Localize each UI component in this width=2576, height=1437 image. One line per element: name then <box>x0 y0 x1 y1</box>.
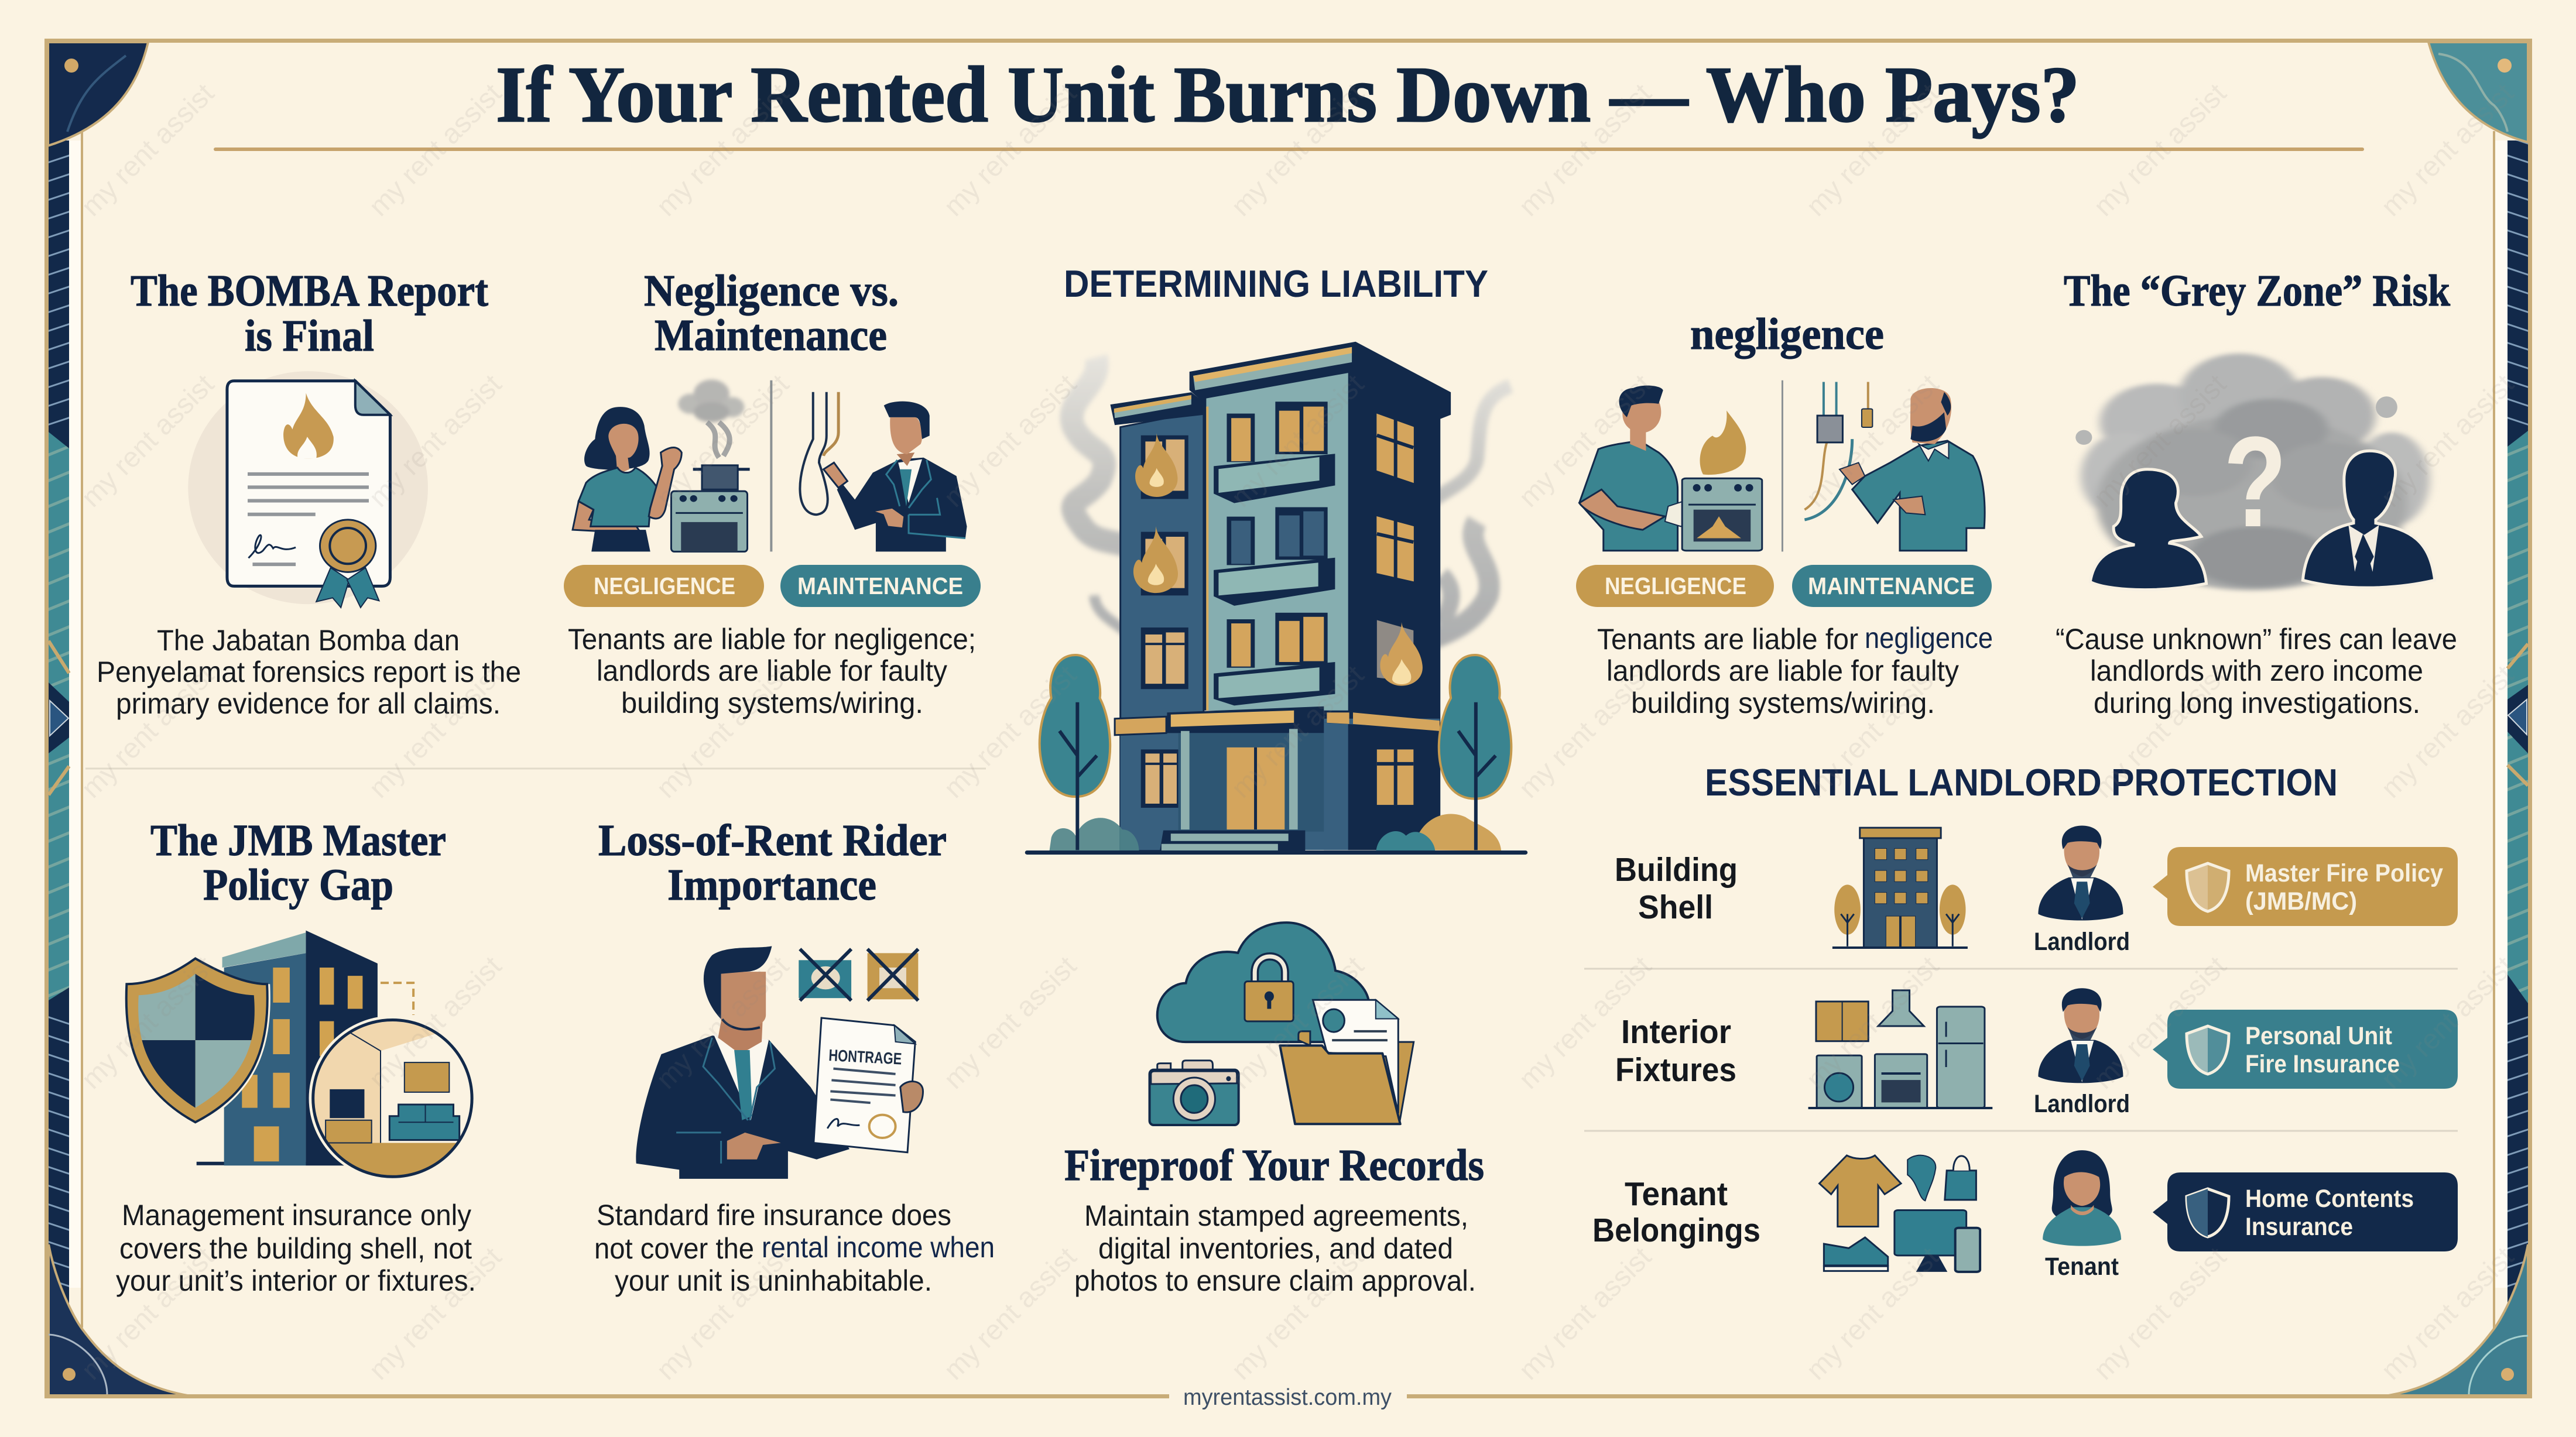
row label: Tenant <box>1625 1175 1728 1213</box>
body text: Management insurance only <box>122 1199 471 1232</box>
heading: Loss-of-Rent Rider <box>598 816 947 865</box>
heading: negligence <box>1690 310 1884 359</box>
panel: JMB master policy gap <box>116 816 482 1297</box>
body text: your unit’s interior or fixtures. <box>116 1264 476 1297</box>
policy callout <box>2153 847 2458 926</box>
body text: Standard fire insurance does <box>597 1199 951 1232</box>
icon: tenant belongings <box>1820 1155 1980 1272</box>
footer website: myrentassist.com.my <box>1183 1385 1392 1410</box>
body text: digital inventories, and dated <box>1098 1232 1453 1265</box>
body text <box>1597 622 1993 719</box>
icon: tenant <box>2043 1150 2121 1246</box>
row: tenant belongings <box>1592 1150 2458 1281</box>
policy callout: Fire Insurance <box>2245 1050 2400 1078</box>
body text: landlords with zero income <box>2090 654 2423 687</box>
label pills <box>1576 565 1992 607</box>
body text <box>116 1199 476 1297</box>
heading: ESSENTIAL LANDLORD PROTECTION <box>1705 761 2338 804</box>
heading: Maintenance <box>655 311 887 360</box>
panel: determining liability <box>1027 262 1526 852</box>
heading: Importance <box>667 860 876 910</box>
body text: rental income when <box>762 1231 995 1264</box>
icon: kitchen fixtures <box>1808 990 1992 1108</box>
body text: primary evidence for all claims. <box>116 687 501 720</box>
illustration: burning apartment building <box>1027 342 1526 852</box>
body text: your unit is uninhabitable. <box>615 1264 932 1297</box>
body text: The Jabatan Bomba dan <box>157 624 460 657</box>
row label: Shell <box>1638 889 1713 926</box>
heading <box>131 266 488 361</box>
body text: landlords are liable for faulty <box>1606 654 1959 687</box>
row: interior fixtures <box>1615 988 2458 1118</box>
panel: loss-of-rent rider <box>594 816 995 1297</box>
title: If Your Rented Unit Burns Down — Who Pays? <box>496 51 2080 139</box>
label pills: NEGLIGENCE <box>594 572 735 599</box>
document heading text: HONTRAGE <box>828 1046 902 1068</box>
body text <box>594 1199 995 1297</box>
row label <box>1615 1013 1736 1089</box>
icon: shield, building and unit interior <box>124 931 482 1182</box>
heading: The JMB Master <box>150 816 446 865</box>
heading: Policy Gap <box>203 860 393 910</box>
policy callout: (JMB/MC) <box>2245 887 2357 915</box>
body text: Tenants are liable for negligence; <box>568 623 976 656</box>
icon: cloud lock, camera and folder <box>1150 922 1414 1125</box>
role label: Landlord <box>2034 928 2130 956</box>
heading <box>644 266 899 360</box>
heading: The BOMBA Report <box>131 266 488 315</box>
panel: essential landlord protection <box>1584 761 2458 1281</box>
icon: fire report document with seal <box>188 371 428 608</box>
heading: DETERMINING LIABILITY <box>1064 262 1488 305</box>
body text: building systems/wiring. <box>1631 687 1935 719</box>
question mark: ? <box>2224 410 2287 554</box>
body text <box>97 624 521 720</box>
heading: Fireproof Your Records <box>1064 1141 1484 1190</box>
body text: negligence <box>1865 622 1993 654</box>
icon: landlord <box>2038 988 2123 1083</box>
policy callout: Master Fire Policy <box>2245 859 2443 887</box>
role label: Landlord <box>2034 1090 2130 1118</box>
icon: building <box>1832 828 1968 948</box>
icon: man in suit holding contract <box>636 946 923 1179</box>
role label: Tenant <box>2045 1253 2119 1281</box>
panel: negligence vs maintenance <box>564 266 981 719</box>
icon: man at oven and electrician <box>1580 380 1985 551</box>
body text <box>1074 1199 1476 1297</box>
row label: Building <box>1615 851 1738 889</box>
body text: building systems/wiring. <box>621 687 923 719</box>
row label <box>1592 1175 1760 1249</box>
heading: is Final <box>245 311 374 361</box>
body text: “Cause unknown” fires can leave <box>2056 623 2457 656</box>
icon: landlord <box>2038 825 2123 921</box>
body text: photos to ensure claim approval. <box>1074 1264 1476 1297</box>
panel: BOMBA report <box>97 266 521 720</box>
policy callout: Insurance <box>2245 1213 2353 1241</box>
panel: negligence (right duplicate) <box>1576 310 1993 719</box>
heading: The “Grey Zone” Risk <box>2064 266 2451 315</box>
label pills <box>564 565 981 607</box>
label pills: MAINTENANCE <box>1808 572 1975 599</box>
body text: covers the building shell, not <box>119 1232 472 1265</box>
row: building shell <box>1615 825 2458 956</box>
heading <box>598 816 947 910</box>
row label: Interior <box>1621 1013 1731 1051</box>
icon: smoke cloud with two silhouettes <box>2075 354 2435 590</box>
label pills: MAINTENANCE <box>797 572 963 599</box>
panel: grey zone risk <box>2056 266 2457 719</box>
body text: Penyelamat forensics report is the <box>97 656 521 688</box>
icon: woman at stove and man with wiring <box>573 380 967 551</box>
panel: fireproof your records <box>1064 922 1484 1297</box>
body text: Maintain stamped agreements, <box>1084 1199 1468 1232</box>
row label: Belongings <box>1592 1212 1760 1249</box>
body text: Tenants are liable for <box>1597 623 1858 656</box>
body text: landlords are liable for faulty <box>597 654 947 687</box>
policy callout <box>2153 1010 2458 1089</box>
label pills: NEGLIGENCE <box>1605 572 1746 599</box>
heading: Negligence vs. <box>644 266 899 315</box>
policy callout: Home Contents <box>2245 1185 2414 1213</box>
body text <box>568 623 976 719</box>
row label: Fixtures <box>1615 1051 1736 1089</box>
body text: not cover the <box>594 1232 754 1265</box>
body text <box>2056 623 2457 719</box>
heading <box>150 816 446 910</box>
policy callout: Personal Unit <box>2245 1022 2392 1050</box>
policy callout <box>2153 1172 2458 1251</box>
row label <box>1615 851 1738 926</box>
body text: during long investigations. <box>2094 687 2420 719</box>
